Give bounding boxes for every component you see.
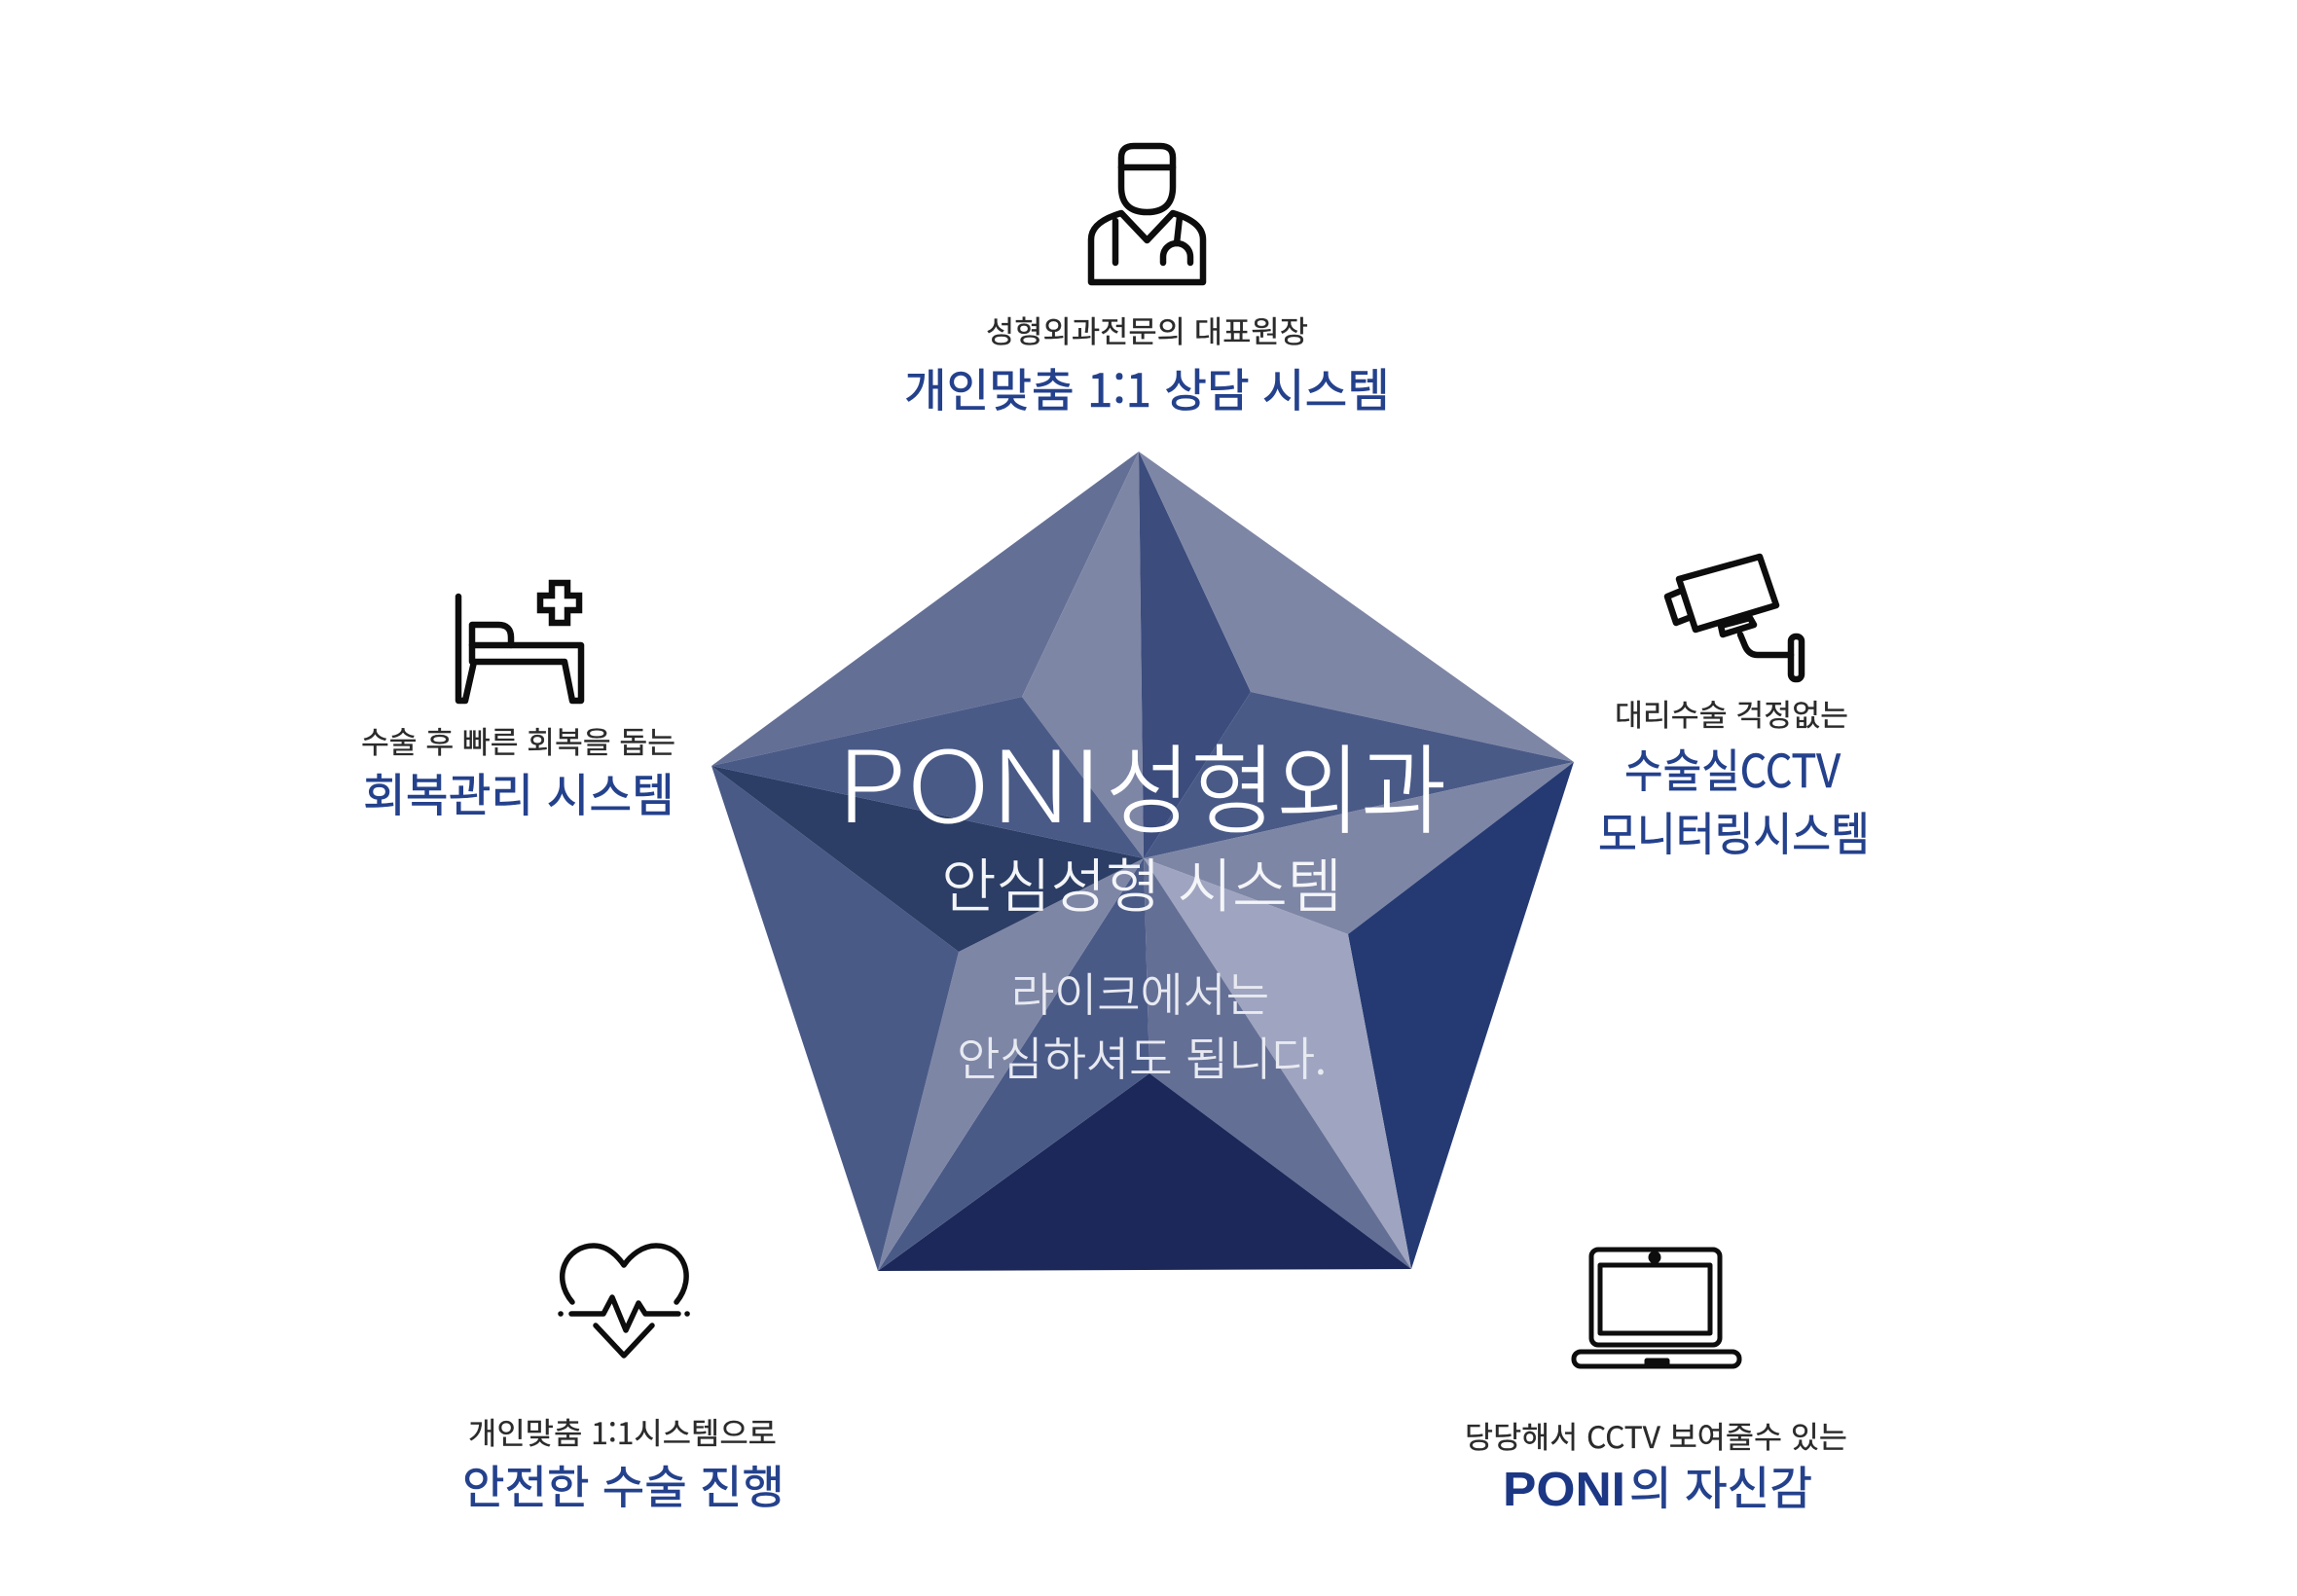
consultation sublabel: 성형외과전문의 대표원장 [986, 308, 1308, 351]
recovery sublabel: 수술 후 빠른 회복을 돕는 [361, 718, 675, 762]
icon: cctv camera [1667, 557, 1802, 679]
cctv heading line one: 수술실CCTV [1624, 734, 1841, 801]
safe surgery heading: 안전한 수술 진행 [462, 1450, 784, 1517]
recovery heading: 회복관리 시스템 [363, 758, 675, 825]
pentagon line two: 안심하셔도 됩니다. [957, 1022, 1327, 1089]
confidence sublabel: 당당해서 CCTV 보여줄수 있는 [1465, 1413, 1847, 1457]
pentagon line one: 라이크에서는 [1011, 958, 1269, 1025]
icon: doctor [1091, 146, 1203, 282]
safe surgery sublabel: 개인맞춤 1:1시스템으로 [468, 1409, 777, 1453]
confidence heading: PONI [1503, 1464, 1625, 1516]
panel: confidence [1465, 1250, 1847, 1518]
icon: heart with pulse [561, 1246, 687, 1356]
consultation heading: 개인맞춤 1:1 상담 시스템 [904, 353, 1390, 420]
icon: laptop [1574, 1250, 1739, 1366]
confidence heading: 의 자신감 [1629, 1451, 1812, 1518]
panel: safe surgery [462, 1246, 784, 1517]
confidence heading [1503, 1451, 1812, 1518]
pentagon title [836, 708, 1446, 853]
panel: central pentagon [711, 452, 1574, 1271]
panel: consultation system [904, 146, 1390, 420]
pentagon title: PONI [836, 708, 1103, 852]
pentagon title: 성형외과 [1106, 712, 1446, 853]
panel: recovery system [361, 583, 675, 825]
icon: bed with cross [458, 583, 581, 701]
pentagon subtitle: 안심성형 시스템 [941, 840, 1342, 925]
cctv sublabel: 대리수술 걱정없는 [1615, 691, 1848, 735]
pentagon facets [711, 452, 1574, 1271]
panel: CCTV monitoring [1598, 557, 1870, 864]
cctv heading line two: 모니터링시스템 [1598, 797, 1870, 864]
